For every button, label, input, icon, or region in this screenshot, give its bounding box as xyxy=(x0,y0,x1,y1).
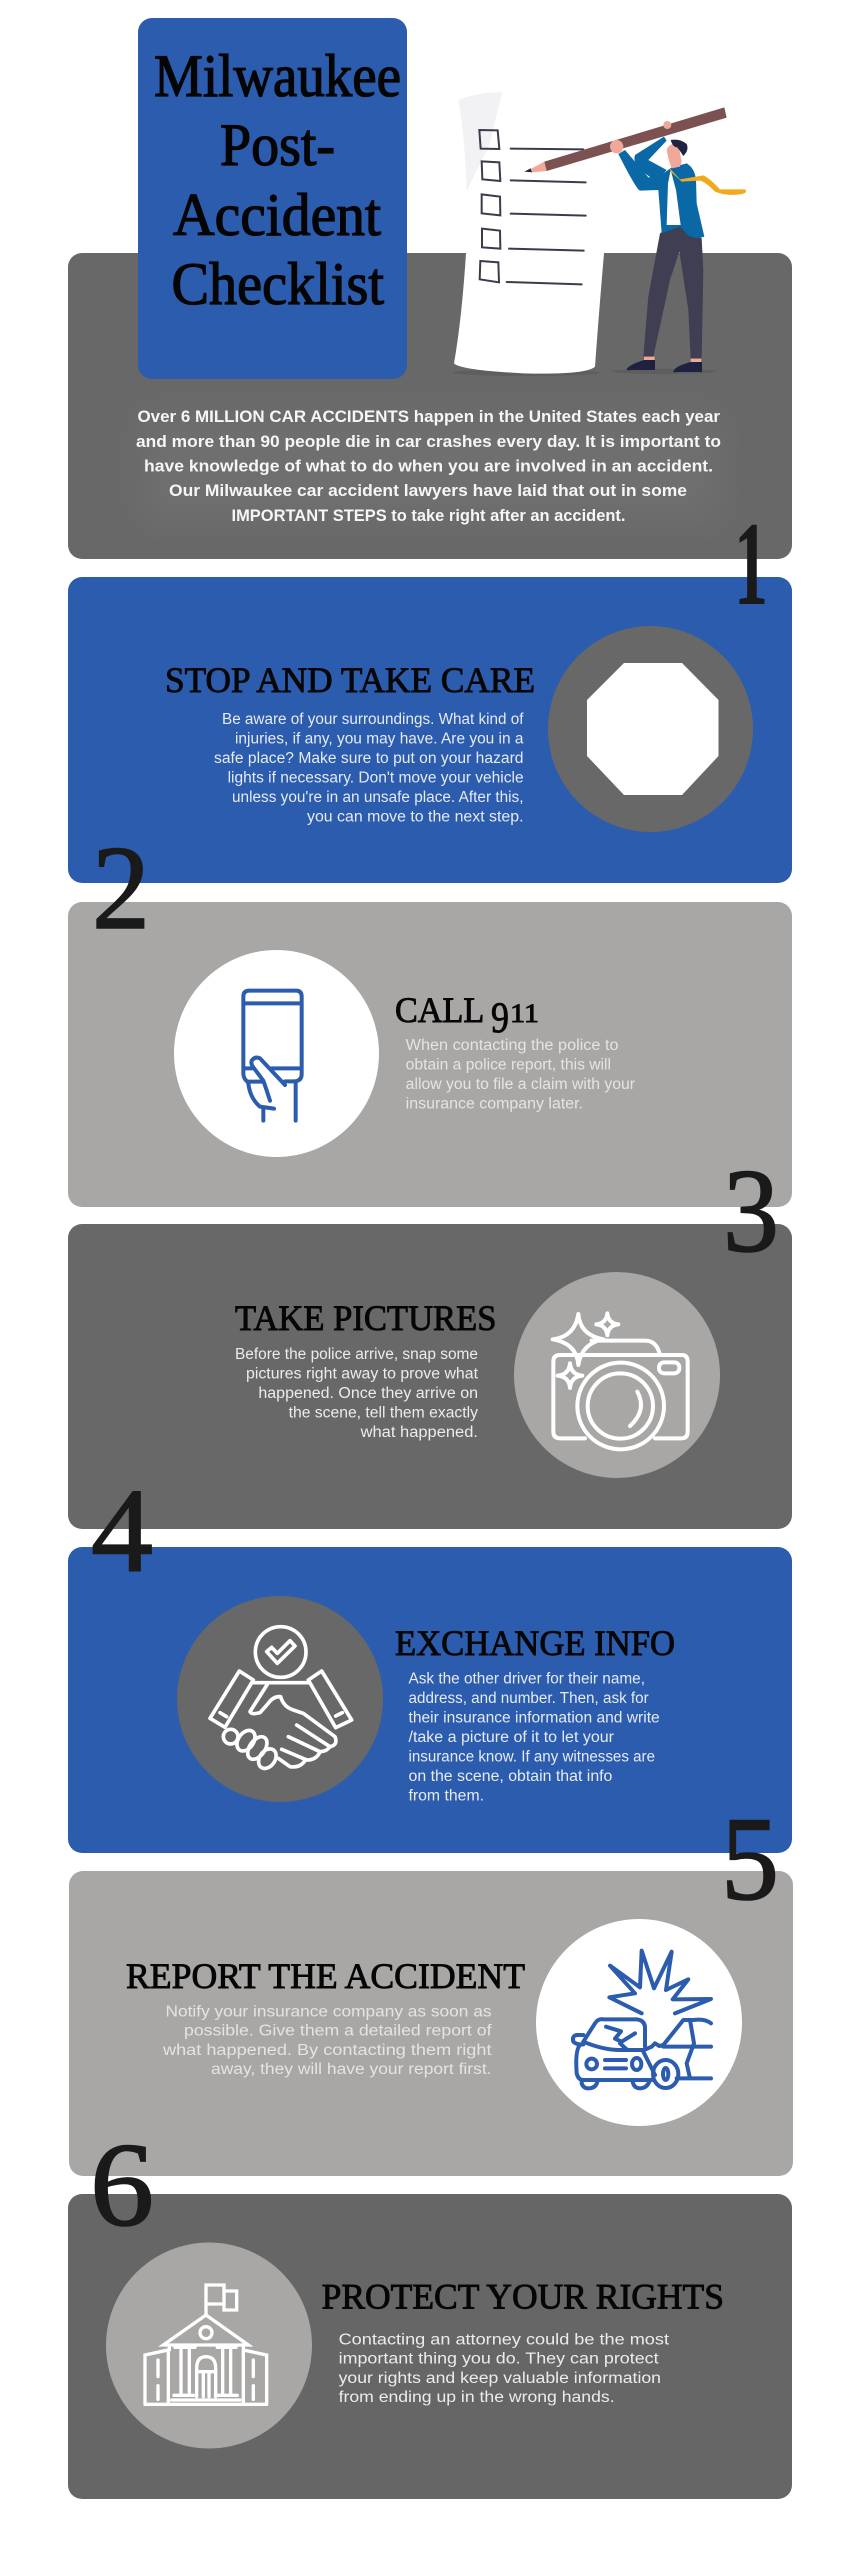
intro text: Over 6 MILLION CAR ACCIDENTS happen in the United States each year xyxy=(138,407,720,426)
text: step 4 body xyxy=(408,1670,660,1805)
text: step 6 body: Contacting an attorney could be the most xyxy=(339,2331,670,2348)
icon: hand holding phone xyxy=(174,950,379,1157)
title panel: Post- xyxy=(220,112,335,178)
text: step 3 body xyxy=(235,1346,479,1441)
number 5: 5 xyxy=(721,1792,779,1925)
text: step 2 body: obtain a police report, this will xyxy=(406,1056,611,1074)
text: step 5 body: Notify your insurance company as soon as xyxy=(166,2004,492,2021)
text: step 1 body: lights if necessary. Don't move your vehicle xyxy=(228,770,524,786)
illustration: man with giant pencil and checklist xyxy=(453,92,746,376)
text: step 4 body: their insurance information and write xyxy=(408,1710,660,1726)
text: step 2 body: When contacting the police to xyxy=(406,1037,618,1054)
icon: camera xyxy=(514,1272,720,1478)
text: step 4 body: address, and number. Then, ask for xyxy=(408,1690,649,1707)
panel: step 4 exchange info xyxy=(68,1547,792,1853)
number 4: 4 xyxy=(91,1464,153,1597)
title panel: Milwaukee xyxy=(154,43,401,109)
title panel: Accident xyxy=(173,182,381,248)
intro text xyxy=(136,407,721,525)
intro text: have knowledge of what to do when you are involved in an accident. xyxy=(144,456,713,476)
heading: call 911: CALL xyxy=(395,990,483,1030)
intro text: Our Milwaukee car accident lawyers have laid that out in some xyxy=(169,481,687,500)
text: step 4 body: /take a picture of it to let your xyxy=(408,1729,614,1746)
text: step 3 body: the scene, tell them exactly xyxy=(289,1405,478,1422)
text: step 5 body: away, they will have your report first. xyxy=(211,2061,492,2078)
heading: stop and take care: STOP AND TAKE CARE xyxy=(165,660,535,700)
text: step 6 body: from ending up in the wrong hands. xyxy=(339,2389,615,2406)
icon: stop sign xyxy=(548,626,753,832)
text: step 1 body: unless you're in an unsafe place. After this, xyxy=(232,789,524,806)
icon: handshake xyxy=(177,1596,383,1802)
heading: exchange info: EXCHANGE INFO xyxy=(395,1623,675,1663)
panel: introduction xyxy=(68,253,792,559)
text: step 5 body xyxy=(162,2004,492,2078)
text: step 1 body xyxy=(214,711,524,826)
text: step 5 body: what happened. By contacting them right xyxy=(162,2042,492,2059)
intro text: and more than 90 people die in car crashes every day. It is important to xyxy=(136,432,721,451)
text: step 1 body: injuries, if any, you may have. Are you in a xyxy=(235,730,524,748)
text: step 1 body: safe place? Make sure to put on your hazard xyxy=(214,750,524,767)
panel: step 1 stop and take care xyxy=(68,577,792,883)
text: step 3 body: happened. Once they arrive on xyxy=(258,1385,478,1402)
number 2: 2 xyxy=(92,821,150,954)
heading: protect your rights: PROTECT YOUR RIGHTS xyxy=(322,2277,724,2317)
text: step 4 body: from them. xyxy=(408,1788,484,1805)
icon: car crash xyxy=(536,1919,742,2126)
heading: call 911: 9 xyxy=(491,995,509,1042)
text: step 1 body: you can move to the next step. xyxy=(307,808,524,826)
panel: step 5 report the accident xyxy=(69,1871,793,2176)
text: step 2 body: insurance company later. xyxy=(406,1096,583,1113)
title panel: Checklist xyxy=(172,251,384,317)
text: step 1 body: Be aware of your surroundings. What kind of xyxy=(222,711,524,728)
text: step 3 body: what happened. xyxy=(360,1424,478,1441)
text: step 4 body: insurance know. If any witnesses are xyxy=(408,1749,655,1766)
panel: step 3 take pictures xyxy=(68,1224,792,1529)
panel: step 6 protect your rights xyxy=(68,2194,792,2499)
heading: take pictures: TAKE PICTURES xyxy=(235,1298,496,1338)
heading: call 911: 11 xyxy=(510,999,539,1028)
text: step 2 body: allow you to file a claim with your xyxy=(406,1076,635,1093)
number 6: 6 xyxy=(90,2118,154,2251)
text: step 2 body xyxy=(406,1037,635,1113)
text: step 6 body: your rights and keep valuable information xyxy=(339,2370,661,2387)
text: step 3 body: pictures right away to prove what xyxy=(246,1366,479,1383)
text: step 4 body: Ask the other driver for their name, xyxy=(408,1670,645,1688)
text: step 4 body: on the scene, obtain that info xyxy=(408,1768,612,1785)
heading: report the accident: REPORT THE ACCIDENT xyxy=(126,1956,525,1996)
icon: courthouse xyxy=(106,2242,312,2448)
number 1: 1 xyxy=(734,497,768,630)
text: step 6 body: important thing you do. They can protect xyxy=(339,2351,659,2368)
text: step 6 body xyxy=(339,2331,670,2406)
text: step 5 body: possible. Give them a detailed report of xyxy=(184,2022,492,2039)
number 3: 3 xyxy=(723,1144,779,1277)
text: step 3 body: Before the police arrive, snap some xyxy=(235,1346,478,1363)
panel: step 2 call 911 xyxy=(68,902,792,1207)
intro text: IMPORTANT STEPS to take right after an accident. xyxy=(232,506,626,525)
title panel xyxy=(138,18,407,379)
